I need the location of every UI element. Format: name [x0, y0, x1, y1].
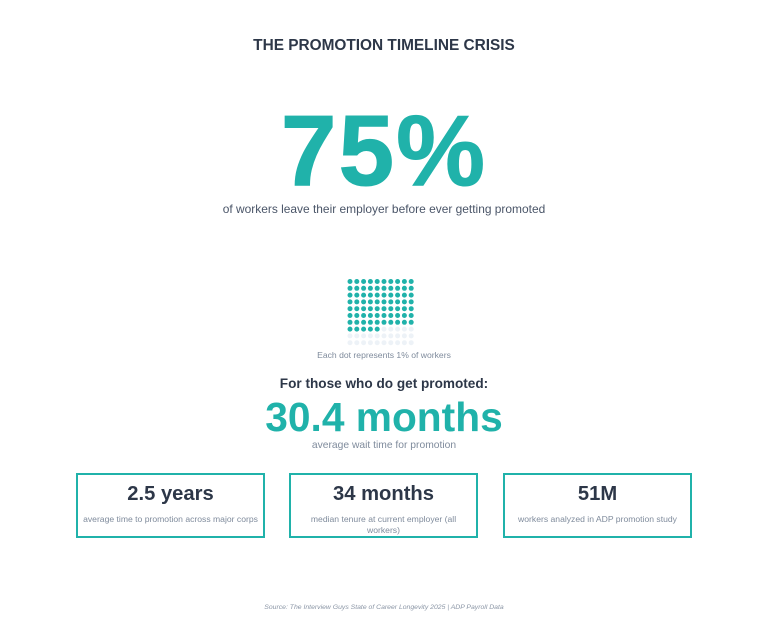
card: 34 months	[289, 473, 478, 538]
big stat: 75%: 75%	[281, 95, 487, 207]
card: 34 months: median tenure at current employer (all workers)	[311, 514, 456, 535]
card: 51M: workers analyzed in ADP promotion study	[518, 514, 677, 524]
card: 2.5 years	[76, 473, 265, 538]
card: 2.5 years: 2.5 years	[127, 483, 214, 505]
secondary stat: 30.4 months: 30.4 months	[265, 394, 503, 440]
card: 51M: 51M	[578, 483, 617, 505]
title: THE PROMOTION TIMELINE CRISIS	[253, 37, 515, 54]
card: 34 months: 34 months	[333, 483, 434, 505]
source note: Source: The Interview Guys State of Career Longevity 2025 | ADP Payroll Data	[264, 604, 504, 611]
card: 51M	[503, 473, 692, 538]
subheading: For those who do get promoted:	[280, 376, 488, 391]
secondary stat caption: average wait time for promotion	[312, 440, 456, 451]
dot grid: 75 of 100 workers	[348, 279, 414, 345]
dot grid caption: Each dot represents 1% of workers	[317, 350, 451, 360]
big stat caption: of workers leave their employer before ever getting promoted	[223, 202, 545, 216]
card: 2.5 years: average time to promotion across major corps	[83, 514, 258, 524]
